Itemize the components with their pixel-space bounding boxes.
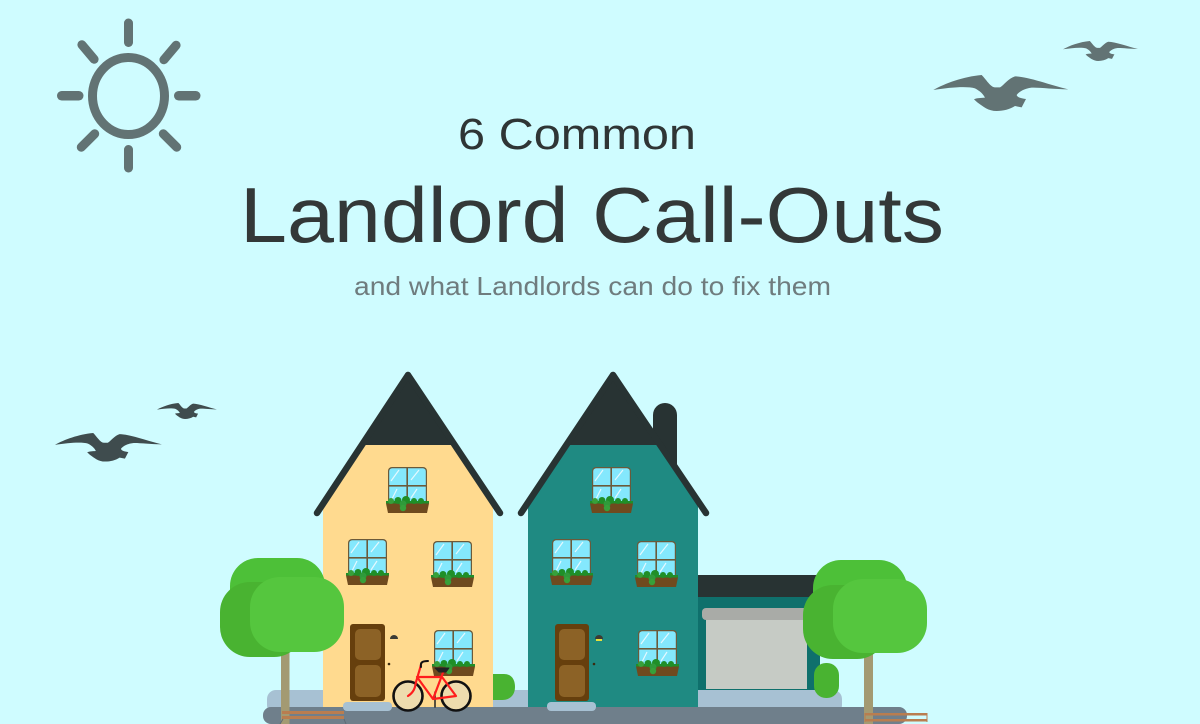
bench: right — [865, 713, 927, 722]
windows — [346, 467, 475, 676]
roof eaves — [521, 375, 706, 513]
house: yellow — [317, 374, 500, 707]
chimney — [653, 403, 677, 475]
icon: small bird top right — [1063, 41, 1138, 61]
house: teal — [521, 374, 706, 707]
title: Landlord Call-Outs: Landlord Call-Outs — [240, 171, 944, 259]
bicycle — [394, 661, 470, 710]
walls — [323, 445, 493, 707]
icon: large bird top right — [933, 75, 1068, 111]
tree: right — [803, 560, 927, 724]
garage — [698, 575, 820, 690]
title: 6 Common: 6 Common — [458, 110, 696, 159]
windows — [550, 467, 679, 676]
tree: left — [220, 558, 344, 724]
bench: left — [280, 711, 346, 724]
roof eaves — [317, 375, 500, 513]
door — [555, 624, 603, 701]
walls — [528, 445, 698, 707]
bush: garage — [814, 663, 839, 698]
bush: between houses — [493, 674, 515, 700]
icon: small bird left — [157, 403, 217, 419]
roof — [566, 374, 660, 446]
roof — [361, 374, 455, 446]
door steps — [343, 702, 596, 711]
icon: large bird left — [55, 433, 162, 462]
pavement — [267, 690, 842, 714]
road — [263, 707, 907, 724]
icon: sun — [57, 18, 200, 172]
subtitle: and what Landlords can do to fix them — [354, 271, 831, 301]
door — [350, 624, 398, 701]
